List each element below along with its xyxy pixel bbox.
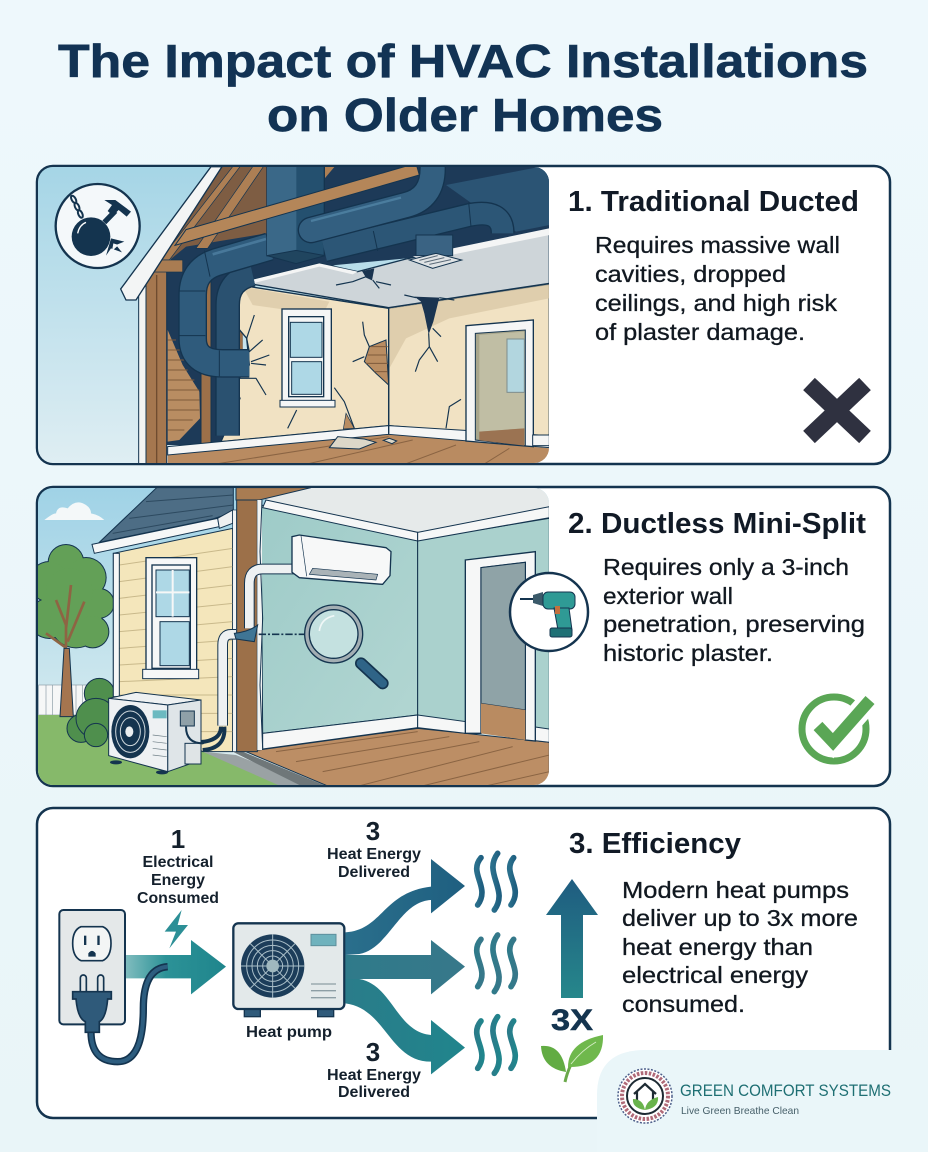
- lath: [168, 330, 200, 442]
- label: electrical energy consumed: Electrical: [142, 854, 214, 871]
- illustration: house with mini-split: [29, 485, 549, 790]
- second long duct: [324, 214, 503, 250]
- ceiling: [242, 230, 549, 308]
- plenum box: [267, 165, 324, 256]
- heat waves middle: [477, 935, 515, 992]
- label: heat energy delivered bottom: Heat Energy: [327, 1067, 421, 1084]
- body text: efficiency: deliver up to 3x more: [622, 905, 858, 931]
- body text: traditional ducted: Requires massive wall: [595, 232, 840, 258]
- fence: [39, 685, 93, 715]
- tagline: Live Green Breathe Clean: [681, 1105, 799, 1117]
- icon: check mark: [802, 697, 870, 761]
- body text: efficiency: Modern heat pumps: [622, 877, 849, 903]
- roof and gutter: [99, 488, 233, 542]
- logo: [618, 1069, 672, 1123]
- icon: leaves: [541, 1035, 603, 1082]
- outdoor unit: [109, 692, 201, 705]
- title: [58, 35, 868, 141]
- input arrow: [126, 940, 226, 994]
- secondary vertical duct: [228, 274, 253, 436]
- door: [465, 552, 535, 741]
- label: electrical energy consumed: [137, 824, 219, 907]
- label: 3X: 3X: [551, 1004, 593, 1037]
- bolt: [165, 910, 188, 948]
- window: [146, 558, 197, 671]
- walls: [221, 285, 389, 442]
- plaster hole with lath: [364, 340, 389, 385]
- baseboards: [168, 426, 389, 455]
- company name: GREEN COMFORT SYSTEMS: [680, 1081, 891, 1100]
- dashed connector: [259, 632, 304, 637]
- beam: [175, 163, 419, 245]
- indoor AC unit: [292, 535, 391, 584]
- body text: traditional ducted: cavities, dropped: [595, 261, 786, 287]
- body text: ductless mini-split: historic plaster.: [603, 640, 773, 666]
- ceiling holes: [414, 297, 439, 334]
- icon: drill: [510, 573, 588, 651]
- label: heat energy delivered top: [327, 816, 421, 881]
- house siding: [113, 528, 233, 752]
- heading: traditional ducted: 1. Traditional Ducted: [568, 186, 859, 218]
- floor: [246, 728, 549, 787]
- body text: efficiency: consumed.: [622, 991, 745, 1017]
- output arrows: [345, 859, 465, 955]
- bush: [67, 678, 116, 747]
- label: heat pump: Heat pump: [246, 1024, 332, 1041]
- body text: traditional ducted: ceilings, and high risk: [595, 290, 838, 316]
- heat waves bottom: [477, 1017, 515, 1073]
- panel: traditional ducted: [36, 163, 890, 465]
- door: [466, 320, 533, 447]
- body text: ductless mini-split: exterior wall: [603, 583, 733, 609]
- ceiling vent: [416, 235, 453, 256]
- icon: up arrow 3X: [546, 879, 598, 998]
- icon: wrecking ball and hammer: [56, 184, 140, 268]
- label: heat energy delivered bottom: [327, 1037, 421, 1101]
- floor: [168, 434, 549, 463]
- body text: traditional ducted: of plaster damage.: [595, 319, 805, 345]
- body text: efficiency: heat energy than: [622, 934, 813, 960]
- body text: ductless mini-split: Requires only a 3-inch: [603, 554, 849, 580]
- tree: [38, 544, 113, 718]
- footer brand tab: [597, 1050, 928, 1152]
- post and beam: [233, 510, 237, 752]
- diagram: energy flow: [59, 853, 515, 1074]
- heading: efficiency: 3. Efficiency: [569, 828, 741, 860]
- attic dark and rafters: [166, 165, 549, 445]
- label: electrical energy consumed: Consumed: [137, 890, 219, 907]
- main bent duct: [193, 247, 269, 363]
- label: electrical energy consumed: Energy: [151, 872, 205, 889]
- grass: [38, 715, 278, 785]
- body text: efficiency: [622, 877, 858, 1017]
- label: electrical energy consumed: 1: [171, 824, 185, 854]
- icon: X mark: [809, 384, 865, 437]
- window: [282, 309, 331, 401]
- panel: ductless mini-split: [29, 485, 890, 790]
- line set pipes: [249, 569, 294, 628]
- cloud: [44, 502, 104, 520]
- heading: ductless mini-split: 2. Ductless Mini-Split: [568, 508, 866, 540]
- body text: efficiency: electrical energy: [622, 962, 809, 988]
- gable fascia: [121, 167, 222, 300]
- interior ceiling and walls: [266, 488, 549, 533]
- plug and cable: [91, 967, 168, 1062]
- label: heat energy delivered top: Heat Energy: [327, 846, 421, 863]
- body text: ductless mini-split: penetration, preserving: [603, 611, 865, 637]
- title: The Impact of HVAC Installations: [58, 35, 868, 87]
- title: on Older Homes: [267, 89, 663, 141]
- body text: ductless mini-split: [603, 554, 865, 666]
- outlet: [59, 910, 125, 1024]
- exterior wall strip: [138, 286, 146, 463]
- upper duct: [311, 168, 433, 230]
- baseboards: [263, 715, 418, 749]
- heat waves top: [477, 853, 515, 910]
- label: heat energy delivered top: Delivered: [338, 864, 410, 881]
- label: heat energy delivered bottom: Delivered: [338, 1084, 410, 1101]
- label: heat energy delivered top: 3: [366, 816, 380, 846]
- illustration: damaged house with ducts: [36, 163, 549, 465]
- body text: traditional ducted: [595, 232, 840, 345]
- label: heat energy delivered bottom: 3: [366, 1037, 380, 1067]
- debris: [329, 437, 376, 449]
- heat pump: [244, 1008, 260, 1017]
- cracks: [240, 277, 461, 428]
- panel: efficiency: [37, 808, 890, 1118]
- magnifying glass: [361, 663, 383, 683]
- foundation: [204, 752, 299, 785]
